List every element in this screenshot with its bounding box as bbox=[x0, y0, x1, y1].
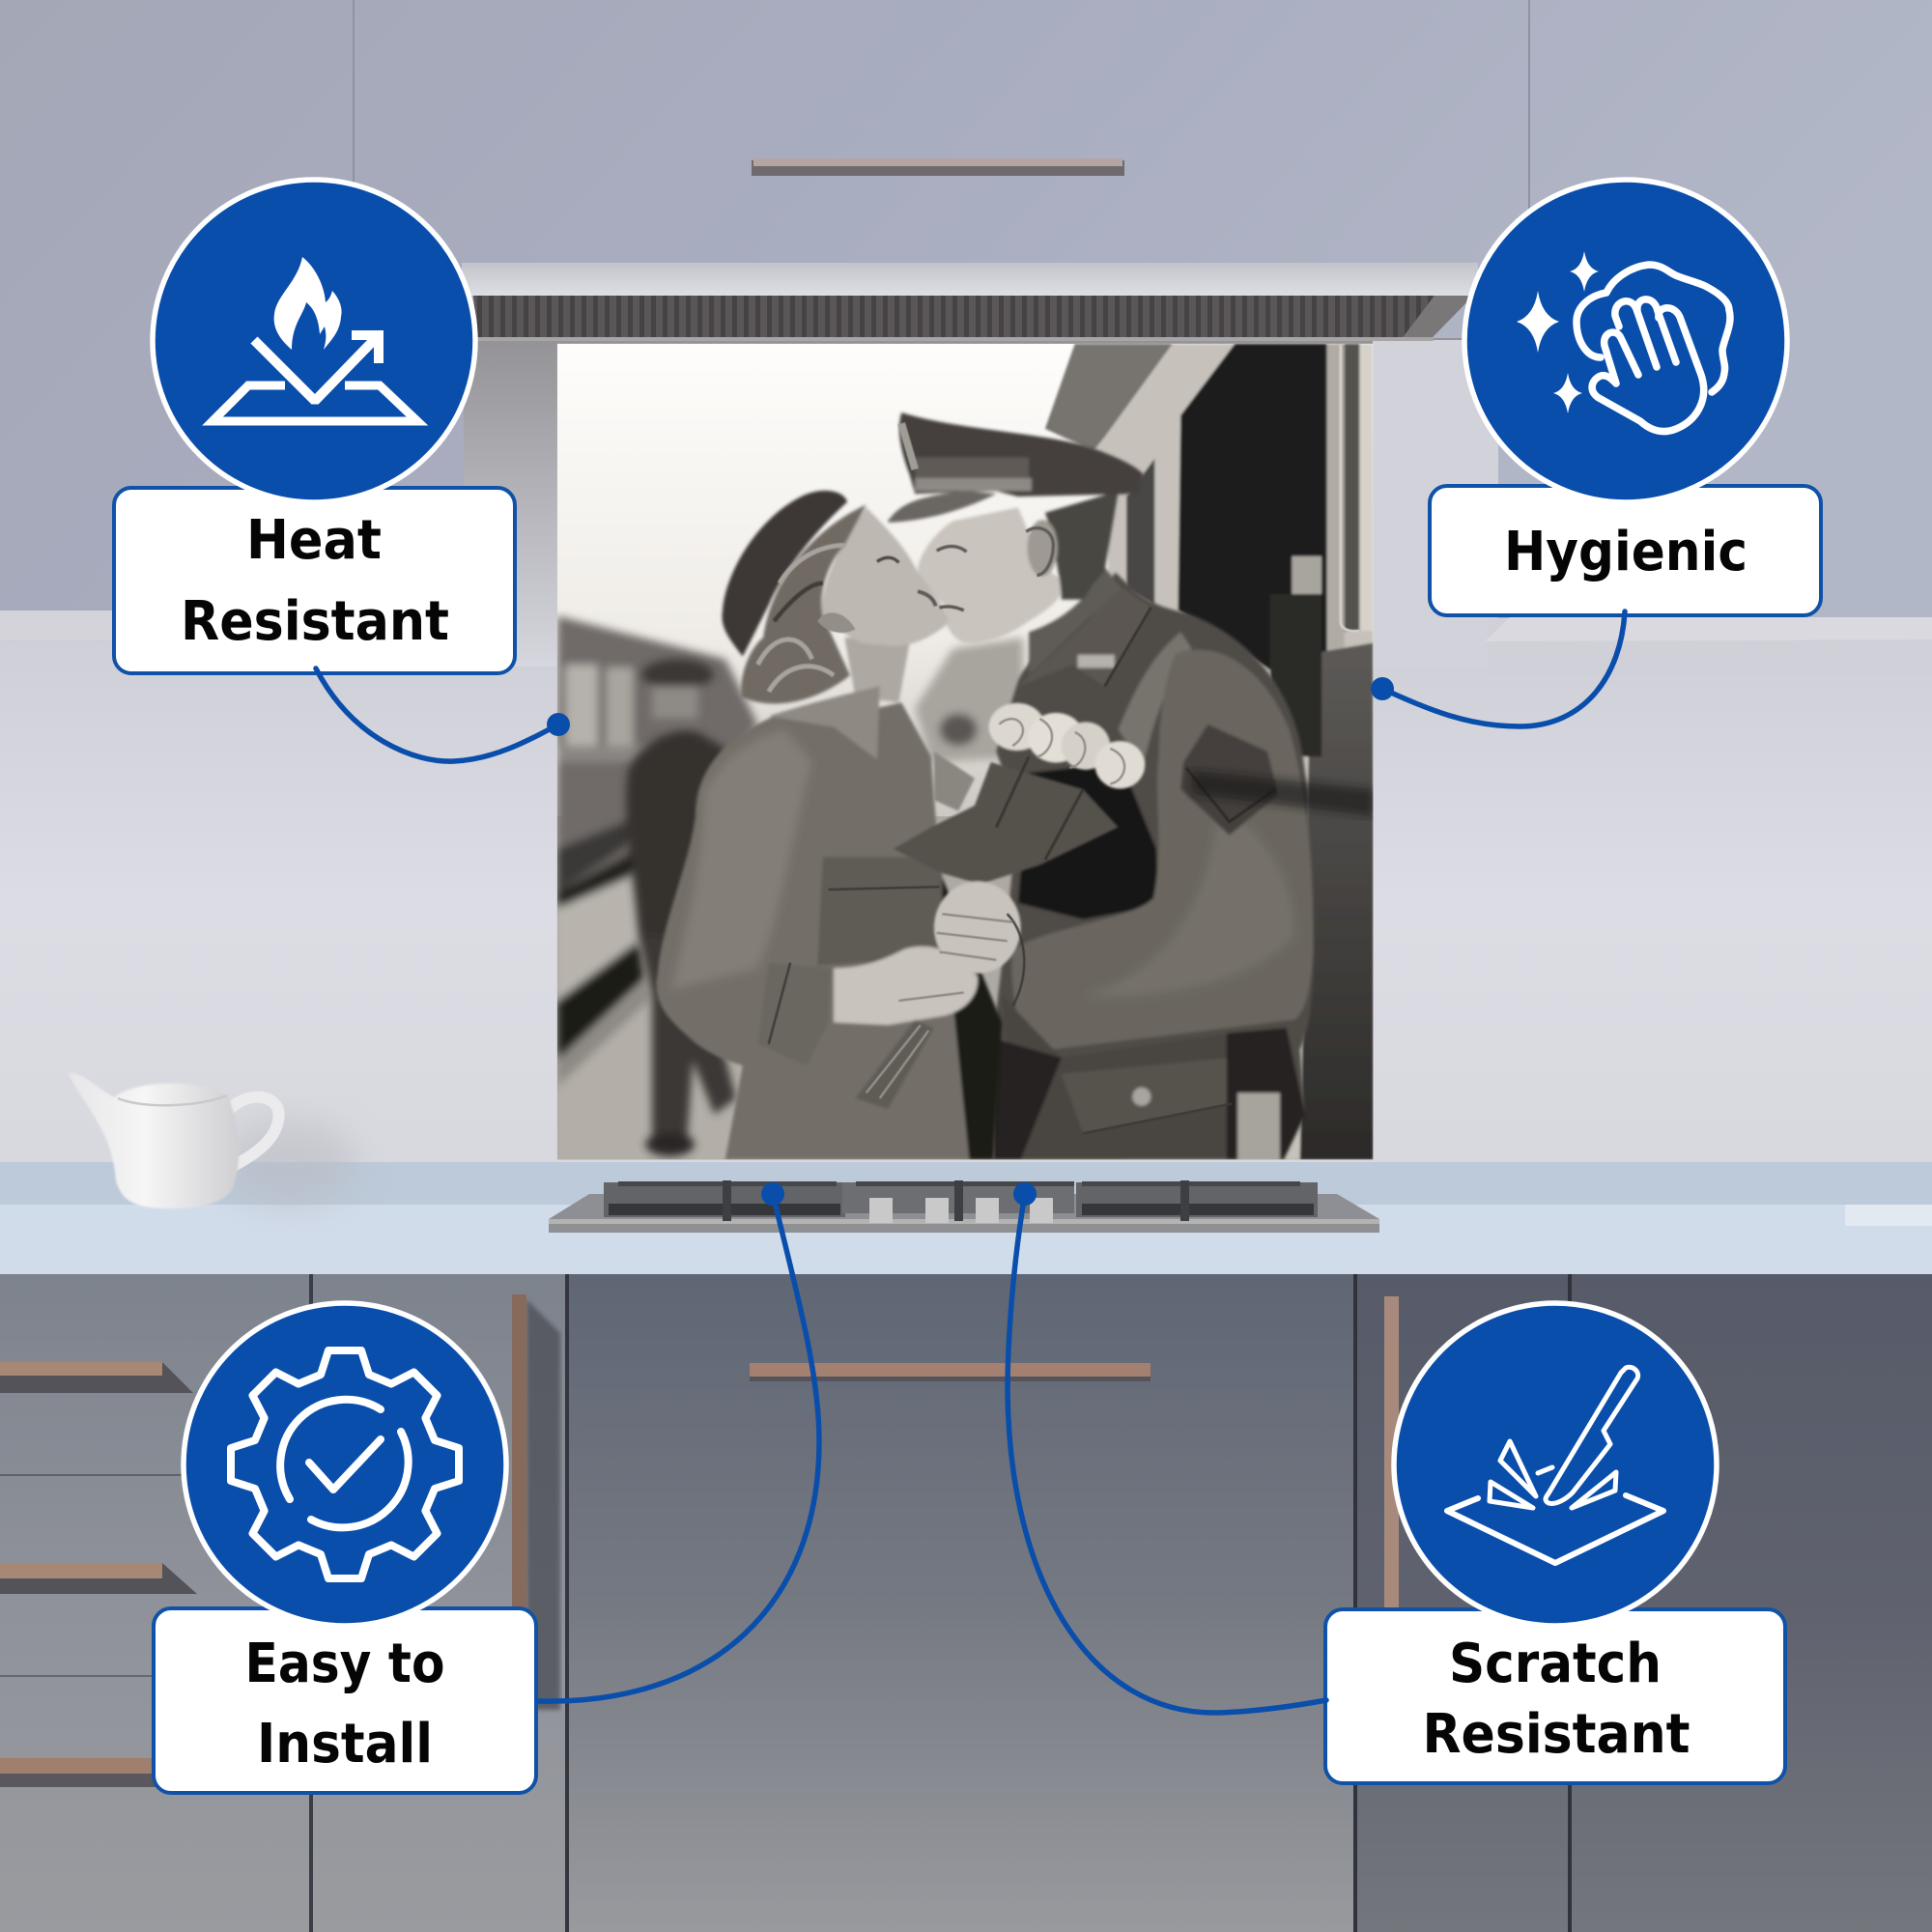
label box bbox=[114, 488, 515, 673]
connector dot bbox=[761, 1182, 784, 1206]
connector line bbox=[1008, 1194, 1326, 1713]
right cabinet bottom edge bbox=[1485, 617, 1932, 641]
background man bbox=[626, 659, 736, 1156]
left cabinet bottom edge bbox=[0, 611, 483, 639]
badge bbox=[184, 1303, 506, 1626]
label text bbox=[245, 1633, 444, 1776]
connector line bbox=[316, 668, 558, 761]
lower cabinets bbox=[0, 1274, 1932, 1932]
badge bbox=[153, 180, 475, 502]
extractor hood bbox=[462, 263, 1478, 341]
soldier bbox=[994, 573, 1314, 1159]
callout: Hygienic bbox=[1371, 180, 1821, 726]
connector dot bbox=[1013, 1182, 1037, 1206]
label text bbox=[181, 509, 449, 653]
photo printed glass splashback bbox=[557, 344, 1373, 1163]
sky bbox=[557, 344, 1373, 832]
soldier head and cap bbox=[888, 412, 1144, 675]
connector line bbox=[1382, 611, 1625, 726]
badge bbox=[1464, 180, 1787, 502]
label text: Heat bbox=[246, 509, 382, 572]
label text: Scratch bbox=[1449, 1633, 1662, 1695]
badge bbox=[1394, 1303, 1717, 1626]
icon: flame over surface with arrow bbox=[213, 257, 417, 421]
woman bbox=[656, 491, 1002, 1159]
upper cabinets bbox=[0, 0, 1932, 618]
icon: knife scratching surface bbox=[1447, 1367, 1663, 1563]
label box bbox=[154, 1608, 536, 1793]
connector dot bbox=[547, 713, 570, 736]
gas hob bbox=[549, 1180, 1379, 1233]
label text bbox=[1422, 1633, 1690, 1766]
countertop bbox=[0, 1162, 1932, 1274]
icon: hand wiping with sparkles bbox=[1517, 251, 1730, 432]
icon: gear with check mark bbox=[231, 1350, 459, 1578]
connector dot bbox=[1371, 677, 1394, 700]
label text: Resistant bbox=[1422, 1703, 1690, 1766]
reflection band bbox=[1191, 770, 1373, 816]
photo fine details bbox=[757, 345, 1359, 1133]
label box bbox=[1430, 486, 1821, 615]
callout: Easy to Install bbox=[154, 1182, 819, 1793]
label text: Easy to bbox=[245, 1633, 444, 1695]
railway carriage bbox=[1045, 344, 1373, 1159]
teapot bbox=[68, 1072, 357, 1208]
label text: Hygienic bbox=[1504, 521, 1747, 583]
wall under hood bbox=[464, 338, 1932, 676]
callout: Scratch Resistant bbox=[1008, 1182, 1785, 1783]
blurred station background bbox=[556, 611, 1028, 1092]
label box bbox=[1325, 1609, 1785, 1783]
tiled wall bbox=[0, 638, 1932, 1164]
bouquet bbox=[894, 703, 1145, 974]
label text: Resistant bbox=[181, 590, 449, 653]
label text: Install bbox=[257, 1713, 433, 1776]
callout: Heat Resistant bbox=[114, 180, 570, 761]
connector line bbox=[539, 1194, 819, 1701]
